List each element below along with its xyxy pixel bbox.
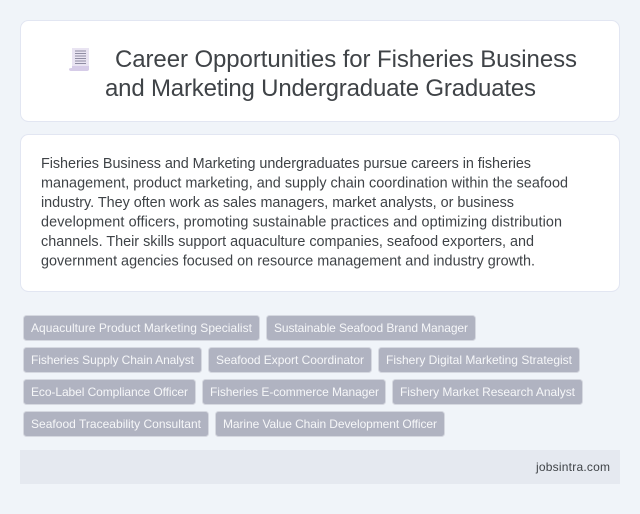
tag: Fisheries E-commerce Manager	[210, 385, 379, 399]
title	[105, 46, 577, 102]
tag	[202, 380, 386, 404]
panel: description: development officers, promoting sustainable practices and optimizing distribution	[41, 214, 562, 230]
tag: Eco-Label Compliance Officer	[31, 385, 188, 399]
panel: description: channels. Their skills support aquaculture companies, seafood exporters, and	[41, 234, 534, 250]
tag: Sustainable Seafood Brand Manager	[274, 321, 468, 335]
tag	[208, 348, 372, 372]
tag: Seafood Export Coordinator	[216, 353, 364, 367]
panel: description: management, product marketing, and supply chain coordination within the seafood	[41, 176, 568, 192]
footer	[20, 450, 620, 484]
panel: description: industry. They often work as sales managers, market analysts, or business	[41, 195, 514, 211]
tag	[216, 412, 444, 436]
tag: Fishery Market Research Analyst	[400, 385, 576, 399]
panel: title card	[20, 20, 620, 122]
tag: Marine Value Chain Development Officer	[223, 417, 437, 431]
panel: description: Fisheries Business and Marketing undergraduates pursue careers in fisheries	[41, 156, 531, 172]
tag: Aquaculture Product Marketing Specialist	[31, 321, 253, 335]
title: and Marketing Undergraduate Graduates	[105, 75, 536, 102]
panel: career tags	[24, 316, 582, 436]
tag	[266, 316, 476, 340]
tag	[24, 412, 208, 436]
tag: Fishery Digital Marketing Strategist	[386, 353, 573, 367]
tag	[24, 316, 260, 340]
panel: description	[20, 134, 620, 292]
tag	[392, 380, 582, 404]
tag	[378, 348, 580, 372]
tag: Seafood Traceability Consultant	[31, 417, 202, 431]
footer: jobsintra.com	[535, 460, 610, 474]
icon: document scroll	[69, 48, 89, 71]
panel: description: government agencies focused on resource management and industry growth.	[41, 254, 535, 270]
tag	[24, 348, 202, 372]
title: Career Opportunities for Fisheries Business	[115, 46, 577, 73]
tag	[24, 380, 196, 404]
tag: Fisheries Supply Chain Analyst	[31, 353, 195, 367]
